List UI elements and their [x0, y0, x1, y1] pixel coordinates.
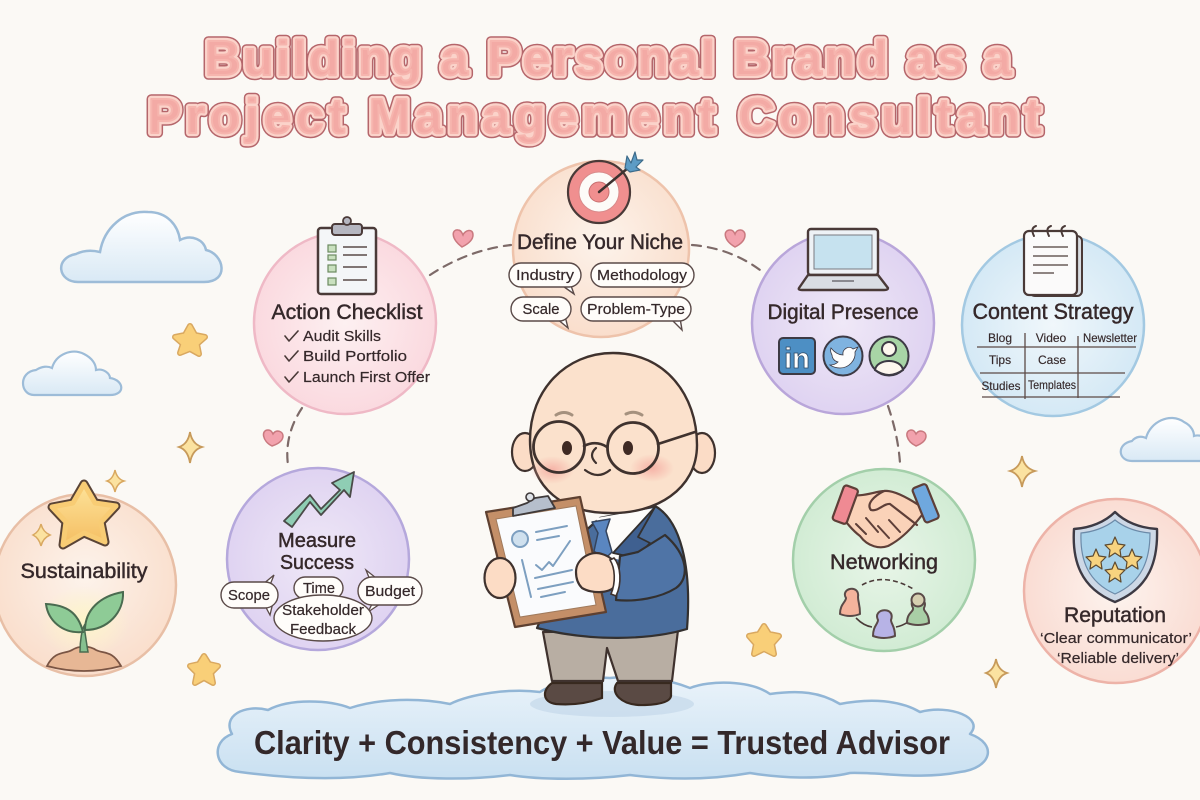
bubble: industry: Industry [516, 267, 575, 284]
cloud: mid left [23, 352, 121, 395]
cloud: right [1121, 418, 1200, 461]
connector: dashed arc right bottom [888, 406, 900, 463]
heart: top left [453, 230, 473, 247]
banner: trusted advisor cloud [218, 677, 988, 779]
icon: seedling [38, 586, 130, 671]
content table: Blog [988, 331, 1012, 345]
sleeve [616, 535, 685, 600]
panel: sustainability [0, 470, 176, 676]
checklist items: Launch First Offer [303, 369, 430, 386]
content table: Templates [1028, 378, 1076, 392]
bubble: problem-type [581, 297, 691, 330]
heading: Reputation [1064, 604, 1166, 627]
sparkle [107, 470, 124, 492]
icon: gold star [52, 484, 116, 545]
bubble: stakeholder feedback: Feedback [290, 621, 356, 638]
shoes [545, 683, 671, 705]
bubble: scope: Scope [228, 587, 270, 604]
checklist items: Build Portfolio [303, 348, 407, 365]
panel: define your niche [509, 152, 694, 337]
icon: profile [870, 336, 908, 376]
icon: twitter [824, 336, 862, 376]
content table: Case [1038, 353, 1066, 367]
clipboard [486, 493, 606, 627]
bubble: stakeholder feedback [274, 595, 372, 641]
heart: left [263, 430, 283, 446]
connector: dashed arc left bottom [287, 408, 302, 465]
title: Project Management Consultant [148, 90, 1041, 144]
panel: content strategy [962, 226, 1144, 416]
heading: Digital Presence [768, 301, 918, 324]
icon: handshake [832, 483, 940, 547]
decorative star: bottom left [190, 656, 218, 683]
bubble: problem-type: Problem-Type [587, 301, 685, 318]
heading: Networking [830, 551, 938, 574]
icon: linkedin: in [784, 343, 810, 375]
content table: Tips [989, 353, 1011, 367]
title: Building a Personal Brand as a [205, 32, 1012, 86]
jacket [537, 506, 688, 638]
bubble: time [294, 577, 343, 599]
panel: digital presence [752, 229, 934, 414]
bubble: time: Time [303, 580, 335, 597]
bubble: scale: Scale [522, 301, 560, 318]
title: Building a Personal Brand as a [205, 32, 1012, 86]
title: Project Management Consultant [148, 90, 1041, 144]
title: Building a Personal Brand as a [205, 32, 1012, 86]
panel: networking [793, 469, 975, 651]
head [512, 353, 715, 513]
heart: top right [725, 230, 745, 247]
banner text: Clarity + Consistency + Value = Trusted Advisor [254, 724, 950, 761]
bubble: budget [358, 570, 422, 612]
title [148, 32, 1041, 144]
heading: Content Strategy [972, 299, 1134, 324]
heading: Measure [278, 530, 356, 552]
cloud shadow under feet [530, 691, 694, 717]
content table [977, 331, 1137, 399]
connector: dashed arc right top [692, 245, 760, 270]
panel: action checklist [254, 217, 436, 414]
checklist items: Audit Skills [303, 328, 381, 345]
bubble: industry [509, 263, 581, 294]
testimonial text: ‘Reliable delivery’ [1057, 650, 1179, 667]
cloud: top left [61, 212, 222, 282]
icon: linkedin [779, 338, 815, 375]
hands [484, 553, 620, 598]
bubble: methodology [591, 263, 694, 287]
decorative star: bottom centre [749, 626, 779, 654]
heart: right [907, 430, 926, 446]
bubble: scope [221, 575, 278, 615]
panel: measure success [221, 468, 422, 650]
testimonial text: ‘Clear communicator’ [1040, 630, 1192, 647]
decorative star: left [175, 326, 205, 354]
sparkle: left [179, 432, 202, 463]
testimonial text [1040, 630, 1192, 667]
heading: Success [280, 552, 354, 574]
icon: rising arrow [284, 472, 354, 527]
content table: Newsletter [1083, 331, 1137, 345]
bubble: stakeholder feedback: Stakeholder [282, 602, 364, 619]
icon: shield with stars [1074, 512, 1157, 602]
trousers [543, 630, 678, 681]
title: Project Management Consultant [148, 90, 1041, 144]
heading: Action Checklist [272, 301, 423, 324]
character: consultant [484, 353, 715, 705]
heading: Define Your Niche [517, 231, 683, 254]
content table: Studies [982, 379, 1020, 393]
heading: Sustainability [20, 560, 148, 583]
sparkle: right top [1010, 456, 1035, 487]
shirt and tie [592, 507, 655, 560]
connector: dashed arc left top [430, 245, 511, 275]
sparkle [33, 524, 50, 546]
sparkle: right bottom [986, 659, 1007, 688]
icon: people network [840, 580, 929, 638]
bubble: scale [511, 297, 571, 328]
icon: clipboard checklist [318, 217, 376, 294]
icon: laptop [799, 229, 888, 290]
checklist items [285, 328, 430, 386]
content table: Video [1036, 331, 1067, 345]
icon: target with arrow [568, 152, 643, 223]
icon: notepad [1024, 226, 1082, 296]
panel: reputation [1024, 499, 1200, 683]
bubble: methodology: Methodology [597, 267, 688, 284]
bubble: budget: Budget [365, 583, 416, 600]
